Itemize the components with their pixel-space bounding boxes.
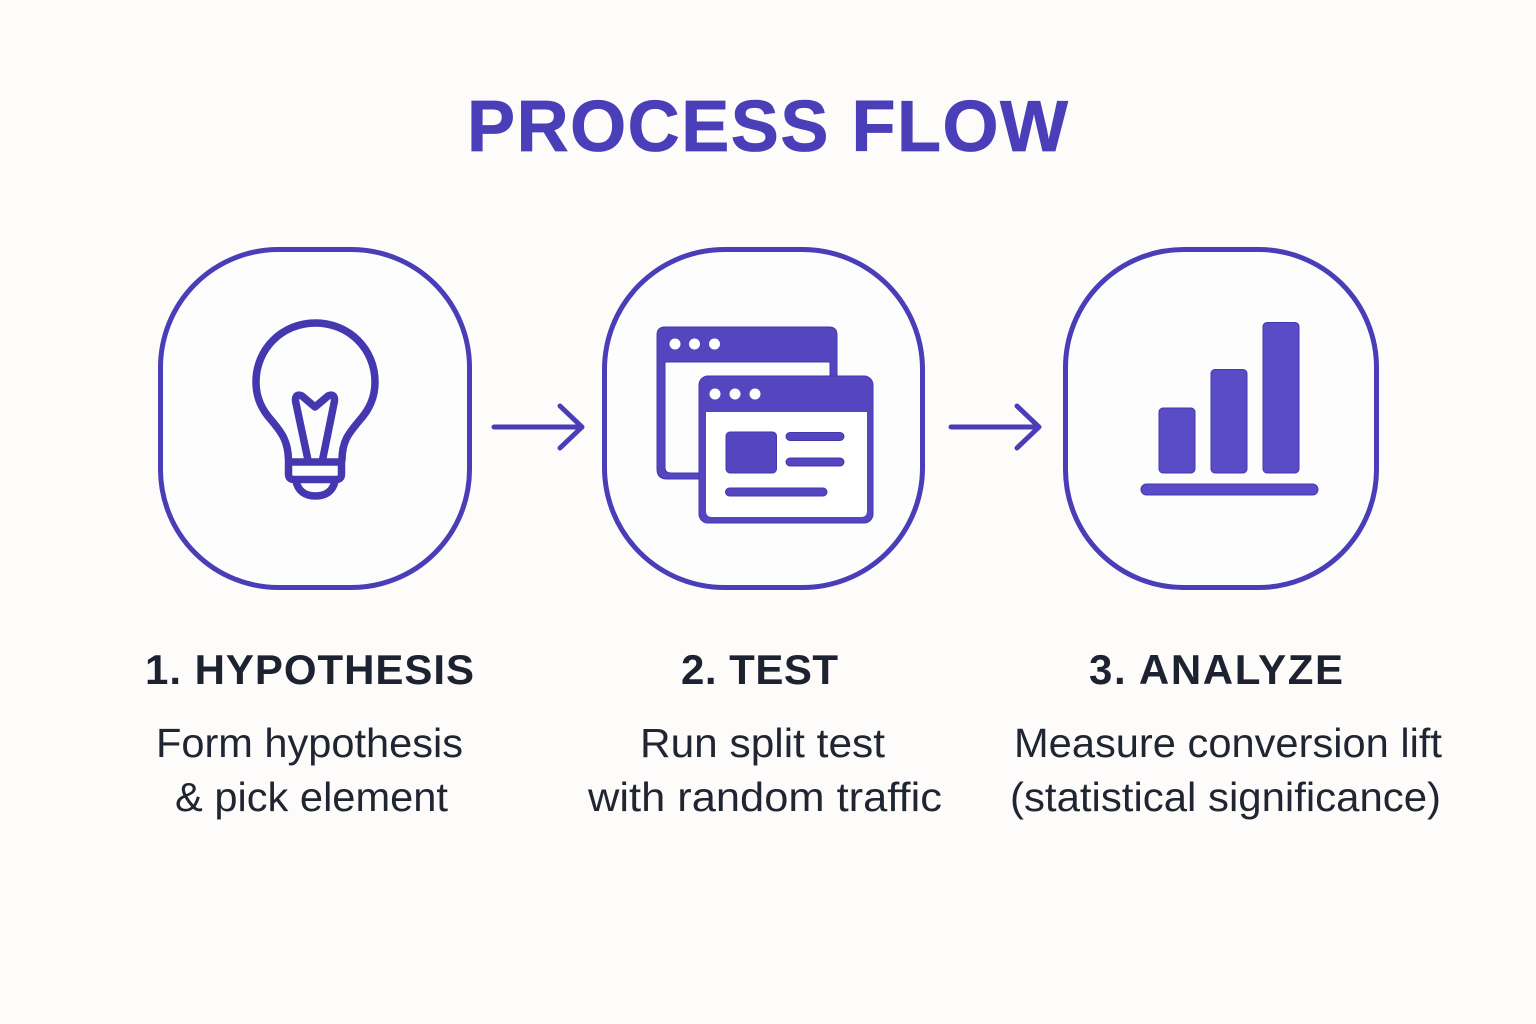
panel: hypothesis icon: [160, 250, 470, 588]
description: test: Run split test: [640, 720, 886, 766]
description: hypothesis: & pick element: [175, 774, 449, 820]
step 1 label: [145, 646, 474, 820]
title: PROCESS FLOW: [467, 87, 1068, 167]
panel: test icon: [604, 250, 922, 588]
arrow: hypothesis to test: [494, 406, 582, 448]
heading: test: 2. TEST: [681, 646, 838, 693]
description: analyze: Measure conversion lift: [1014, 720, 1443, 766]
heading: analyze: 3. ANALYZE: [1089, 646, 1343, 693]
heading: hypothesis: 1. HYPOTHESIS: [145, 646, 474, 693]
panel: analyze icon: [1066, 250, 1376, 588]
description: hypothesis: Form hypothesis: [156, 720, 463, 766]
icon: light bulb: [256, 323, 375, 496]
step 3 label: [1010, 646, 1453, 820]
description: test: with random traffic: [587, 774, 942, 820]
arrow: test to analyze: [951, 406, 1039, 448]
step 2 label: [587, 646, 942, 820]
icon: bar chart: [1141, 322, 1318, 495]
back window: [657, 327, 837, 479]
description: analyze: (statistical significance): [1010, 774, 1441, 820]
front window: [699, 376, 873, 523]
icon: browser windows: [657, 327, 873, 523]
